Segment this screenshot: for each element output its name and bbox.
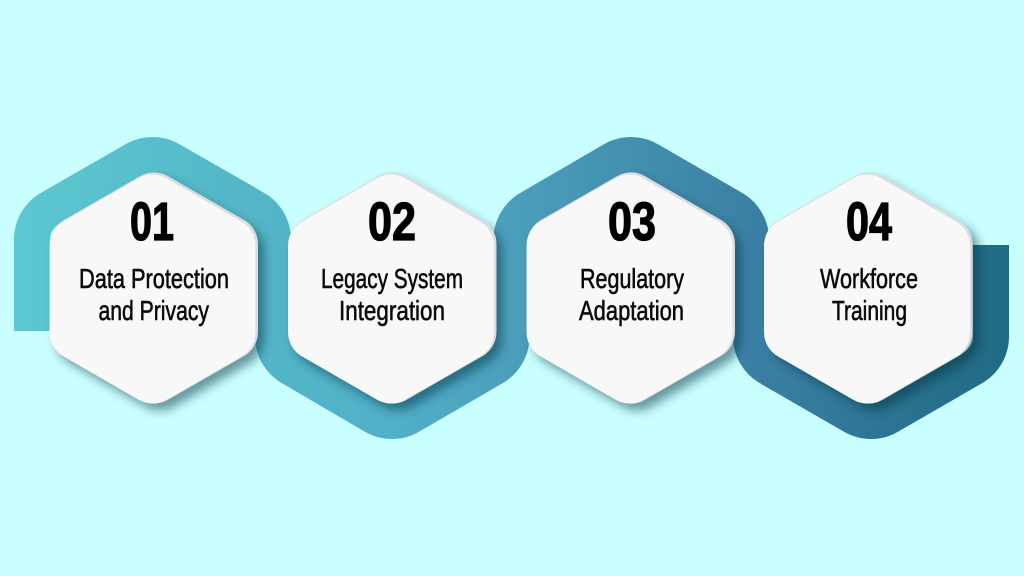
- label: Data Protection and Privacy: [79, 263, 229, 326]
- panel: step 04: [764, 172, 979, 411]
- number 01: 01: [130, 192, 174, 252]
- hexagon face: [527, 175, 732, 403]
- hexagon shadow: [56, 179, 264, 411]
- hexagon face: [50, 175, 255, 403]
- winding ribbon connecting the four hexagons: [32, 155, 991, 421]
- hexagon face: [764, 175, 970, 403]
- label: Legacy System Integration: Legacy System: [321, 263, 463, 294]
- panel: step 02: [288, 172, 502, 411]
- panel: step 01: [50, 172, 264, 411]
- label: Regulatory Adaptation: [579, 263, 684, 326]
- number 02: 02: [368, 192, 416, 252]
- label: Regulatory Adaptation: Adaptation: [579, 295, 684, 326]
- label: Workforce Training: [820, 263, 918, 326]
- label: Legacy System Integration: [321, 263, 463, 326]
- label: Data Protection and Privacy: and Privacy: [98, 295, 209, 326]
- hexagon shadow: [294, 179, 502, 411]
- hexagon face: [288, 175, 494, 403]
- hexagon bevel: [288, 172, 497, 404]
- number 04: 04: [846, 192, 892, 252]
- label: Legacy System Integration: Integration: [339, 295, 445, 326]
- hexagon shadow: [533, 179, 741, 411]
- hexagon bevel: [764, 172, 973, 404]
- number 03: 03: [608, 192, 656, 252]
- label: Workforce Training: Workforce: [820, 263, 918, 294]
- panel: step 03: [527, 172, 741, 411]
- hexagon bevel: [527, 172, 735, 404]
- label: Data Protection and Privacy: Data Protection: [79, 263, 229, 294]
- label: Workforce Training: Training: [832, 295, 907, 326]
- hexagon bevel: [50, 172, 258, 404]
- hexagon shadow: [771, 179, 979, 411]
- label: Regulatory Adaptation: Regulatory: [580, 263, 684, 294]
